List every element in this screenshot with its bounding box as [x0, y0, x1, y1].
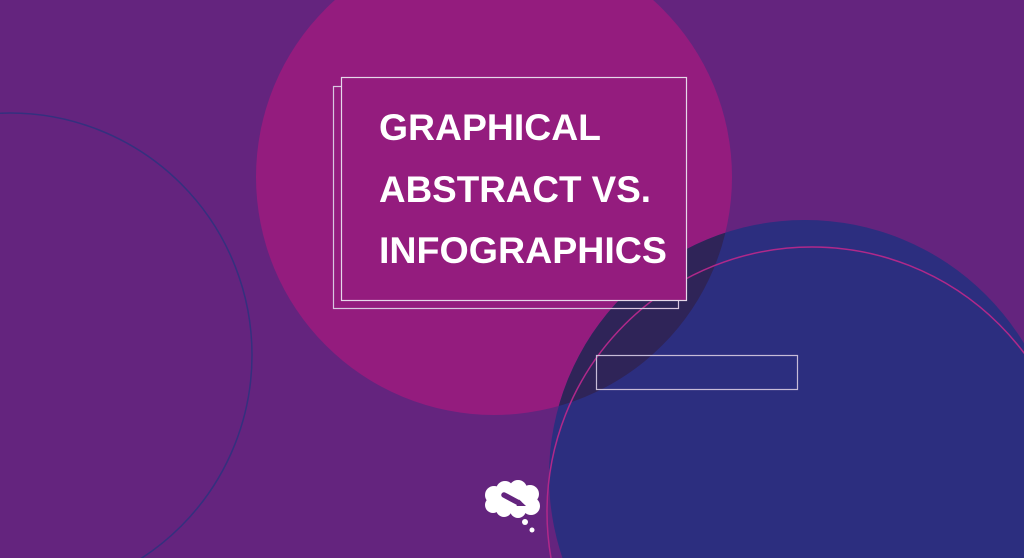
- title: ABSTRACT VS.: [379, 169, 651, 210]
- back frame: [334, 86, 678, 308]
- title: [379, 107, 667, 271]
- pink outline circle: [547, 247, 1024, 558]
- title: GRAPHICAL: [379, 107, 601, 148]
- overlap of circles: [558, 232, 726, 406]
- blue circle: [549, 220, 1024, 558]
- title: INFOGRAPHICS: [379, 230, 667, 271]
- front frame: [342, 78, 686, 300]
- left outline circle: [0, 113, 252, 558]
- icon: brain logo: [485, 480, 540, 532]
- magenta circle: [256, 0, 732, 415]
- empty button rectangle: [596, 356, 798, 390]
